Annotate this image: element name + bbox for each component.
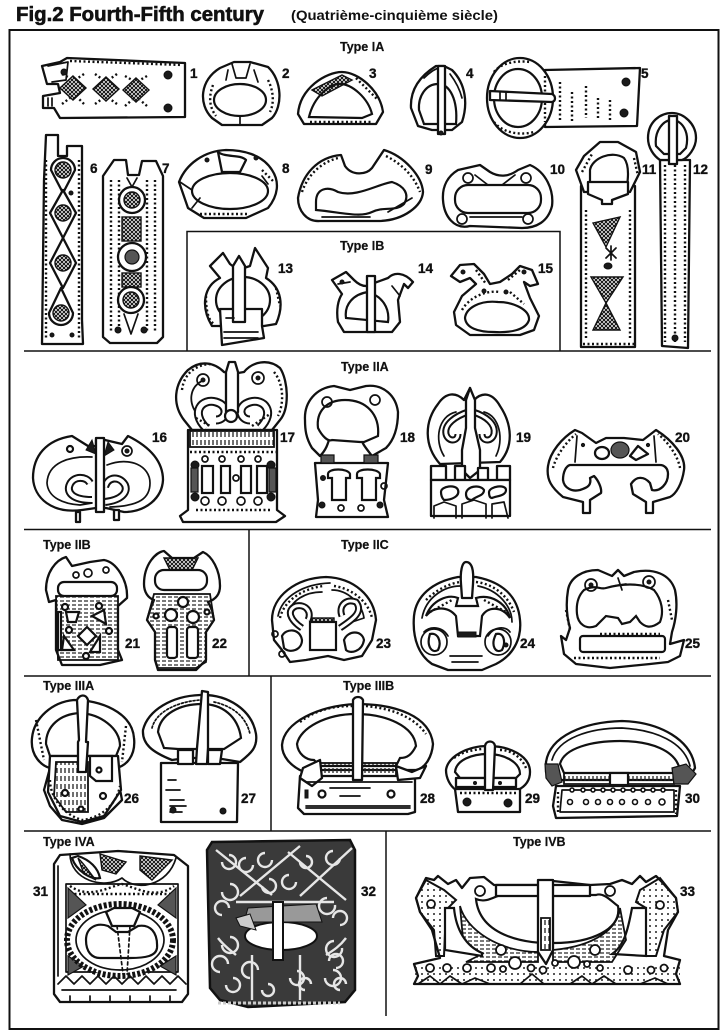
buckle 23 [272, 577, 376, 662]
number 32: 32 [361, 884, 376, 899]
buckle 7 [103, 160, 163, 343]
type labels: Type IIIA [43, 679, 94, 693]
buckle 27 [143, 691, 256, 822]
number 3: 3 [369, 66, 377, 81]
number 33: 33 [680, 884, 696, 899]
number 1: 1 [190, 66, 198, 81]
number 6: 6 [90, 161, 98, 176]
buckle 29 [446, 742, 530, 812]
number 30: 30 [685, 791, 700, 806]
buckle 19 [428, 388, 510, 518]
buckle 3 [298, 72, 383, 124]
number 13: 13 [278, 261, 294, 276]
number 2: 2 [282, 66, 290, 81]
type labels: Type IA [340, 40, 384, 54]
number 10: 10 [550, 162, 565, 177]
number 23: 23 [376, 636, 392, 651]
buckle 24 [414, 562, 520, 670]
buckle 28 [282, 697, 433, 814]
buckle 6 [42, 135, 83, 344]
buckle 9 [298, 150, 423, 221]
number 11: 11 [642, 162, 657, 177]
buckle 12 [648, 113, 696, 348]
number 7: 7 [162, 161, 170, 176]
buckle 14 [332, 272, 413, 332]
number 19: 19 [516, 430, 531, 445]
number 29: 29 [525, 791, 540, 806]
number 16: 16 [152, 430, 168, 445]
buckle 21 [46, 557, 127, 665]
number 24: 24 [520, 636, 536, 651]
buckle 31 [54, 851, 188, 1002]
number 17: 17 [280, 430, 295, 445]
buckle 16 [33, 436, 163, 522]
type labels: Type IIIB [343, 679, 394, 693]
buckle 33 [414, 876, 680, 984]
buckle 2 [203, 62, 279, 125]
buckle 20 [548, 430, 684, 513]
number 12: 12 [693, 162, 708, 177]
number 25: 25 [685, 636, 701, 651]
buckle 11 [576, 142, 640, 347]
type labels: Type IIA [341, 360, 389, 374]
buckle 18 [305, 386, 398, 517]
buckle 13 [205, 248, 281, 345]
number 27: 27 [241, 791, 256, 806]
number 14: 14 [418, 261, 434, 276]
number 4: 4 [466, 66, 474, 81]
type labels: Type IIC [341, 538, 389, 552]
buckle 5 [487, 58, 640, 138]
buckle 15 [451, 264, 539, 335]
type labels: Type IIB [43, 538, 91, 552]
buckle 1 [42, 58, 185, 118]
type labels: Type IVA [43, 835, 95, 849]
number 8: 8 [282, 161, 290, 176]
buckle 17 [176, 362, 287, 522]
buckle 30 [545, 721, 696, 818]
number 26: 26 [124, 791, 140, 806]
number 22: 22 [212, 636, 227, 651]
number 21: 21 [125, 636, 141, 651]
subtitle: (Quatrième-cinquième siècle) [291, 8, 498, 23]
buckle 10 [443, 165, 552, 228]
number 20: 20 [675, 430, 690, 445]
number 31: 31 [33, 884, 49, 899]
number 9: 9 [425, 162, 433, 177]
title: Fig.2 Fourth-Fifth century [16, 4, 265, 26]
number 28: 28 [420, 791, 436, 806]
buckle 8 [179, 150, 277, 218]
buckle 25 [561, 570, 684, 668]
buckle 4 [411, 66, 465, 135]
buckle 22 [144, 551, 220, 670]
number 5: 5 [641, 66, 649, 81]
number 15: 15 [538, 261, 554, 276]
buckle 26 [32, 696, 134, 824]
buckle 32 [207, 840, 355, 1007]
type labels [43, 40, 566, 849]
type labels: Type IVB [513, 835, 566, 849]
type labels: Type IB [340, 239, 384, 253]
number 18: 18 [400, 430, 416, 445]
